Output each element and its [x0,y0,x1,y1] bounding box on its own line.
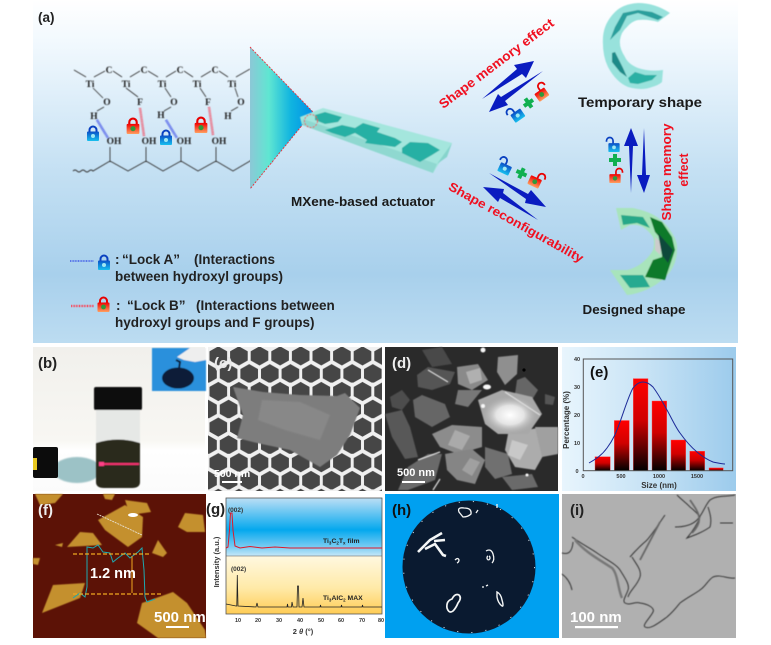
scale d: 500 nm [397,467,435,479]
icons: locks group top [505,81,551,124]
label g: (g) [206,501,225,518]
scale i: 100 nm [570,609,622,626]
molecular structure: C [212,66,219,76]
molecular structure: Ti [228,80,237,90]
label f: (f) [38,502,53,519]
tick labels: 30 [276,618,282,624]
legend: lock B [71,298,335,330]
molecular structure [73,66,272,172]
molecular structure: Ti [86,80,95,90]
axis title y: Intensity (a.u.) [212,536,221,587]
tick labels [574,357,703,480]
label d: (d) [392,355,411,372]
molecular structure: H [90,112,98,122]
panel: (g) XRD plot: AlC [331,595,343,602]
molecular structure: C [141,66,148,76]
legend: lock A: between hydroxyl groups) [115,269,283,284]
temporary shape label: Temporary shape [578,95,702,110]
arrow: from designed shape [483,187,538,220]
label c: (c) [214,355,232,372]
tick labels: 500 [616,474,626,480]
molecular structure: O [103,98,111,108]
tick labels [235,618,384,624]
panel: (g) XRD plot: T [339,538,344,545]
legend: lock A: (Interactions [194,252,275,267]
molecular structure: F [205,98,211,108]
icon: lock B [127,119,139,134]
disk edge specks [404,502,534,632]
arrow: to designed shape [489,173,546,207]
annotations: (002) [228,507,243,514]
panel: (g) XRD plot: film [346,538,360,545]
axis title y: Percentage (%) [562,391,571,449]
icon: lock A [87,126,99,141]
tick labels: 40 [574,357,580,363]
legend: lock B: “Lock B” [127,298,186,313]
panel: (a) actuator schematic [33,0,738,343]
red XRD curve [226,513,382,548]
actuator label: MXene-based actuator [291,195,435,209]
designed shape label: Designed shape [582,302,686,317]
molecular structure: O [237,98,245,108]
tick labels: 1500 [691,474,703,480]
label i: (i) [570,502,584,519]
temporary shape [603,3,670,89]
label e: (e) [590,364,608,381]
legend: lock B: hydroxyl groups and F groups) [115,315,315,330]
arrow: vertical down [637,128,650,193]
fit curve [589,382,725,464]
icons: locks group middle [495,156,546,190]
tick labels: 20 [574,413,580,419]
panel: (g) XRD plot: 2 [343,598,346,602]
label b: (b) [38,355,57,372]
tick labels: 10 [574,441,580,447]
panel: (g) XRD plot: 3 [329,598,332,602]
panel: (g) XRD plot: 2 [336,540,339,546]
arrow: from temporary shape [489,71,543,112]
label: effect vertical: effect [677,152,691,187]
panel: (g) XRD plot: Ti [323,595,329,602]
magnifying triangle [250,47,313,189]
arrow: vertical up [624,128,638,193]
legend: lock A [70,252,283,284]
panel: (g) XRD plot: MAX [346,595,363,602]
panel: (i) TEM image [562,494,736,638]
axis title x: 2 θ (°) [293,627,314,636]
bars [595,379,723,471]
molecular structure: OH [177,137,192,147]
wrinkles [562,495,735,628]
molecular structure: Ti [122,80,131,90]
icon: lock B [195,118,207,133]
height markers [73,554,163,594]
tick labels: 20 [255,618,261,624]
tick labels: 60 [338,618,344,624]
cracks [418,504,503,612]
molecular structure: C [177,66,184,76]
tick labels: 0 [575,469,579,475]
molecular structure: C [106,66,113,76]
molecular structure: Ti [193,80,202,90]
tick labels: 80 [378,618,384,624]
black XRD curve [226,575,382,607]
molecular structure: OH [142,137,157,147]
MXene-based actuator beam [300,108,452,173]
tick labels: 1000 [653,474,665,480]
molecular structure: O [170,98,178,108]
molecular structure: F [137,98,143,108]
legend: lock B: : [116,298,120,313]
panel: (g) XRD plot: x [343,540,346,546]
label: shape memory effect diagonal: Shape memory effect [436,15,557,112]
panel: (e) size distribution chart [562,347,736,491]
molecular structure: H [157,111,165,121]
tick labels: 10 [235,618,241,624]
panel: (f) AFM image [33,494,206,638]
panel: (g) XRD plot: 3 [329,540,332,546]
tick labels: 30 [574,385,580,391]
axes [583,359,733,471]
panel: (c) SEM honeycomb [208,347,382,491]
inset: pouring [152,348,206,391]
legend: lock B: (Interactions between [196,298,335,313]
icons: locks group right [606,137,622,183]
panel: (g) XRD plot: (002) [231,566,246,573]
height profile [73,545,155,602]
tick labels: 0 [581,474,585,480]
legend: lock A: : [115,252,120,267]
icon: lock A [160,130,172,145]
molecular structure: OH [107,137,122,147]
designed shape [610,208,677,295]
label: shape reconfigurability: Shape reconfigurability [446,180,586,265]
panel: (b) vial photo [33,347,206,491]
scale f: 500 nm [154,609,206,626]
tick labels: 70 [359,618,365,624]
legend: lock A: “Lock A” [122,252,180,267]
molecular structure: H [224,112,232,122]
scale c: 500 nm [214,468,250,480]
panel: (g) XRD plot [206,498,384,636]
panel: (g) XRD plot: C [331,538,336,545]
label a: (a) [38,10,54,25]
panel: (h) film disk photo [385,494,559,638]
tick labels: 50 [318,618,324,624]
molecular structure: OH [212,137,227,147]
panel: (d) STEM flakes [385,347,558,491]
axis title x: Size (nm) [641,481,677,490]
molecular structure: Ti [158,80,167,90]
panel: (g) XRD plot: Ti [323,538,329,545]
height label: 1.2 nm [90,566,136,582]
tick labels: 40 [297,618,303,624]
label h: (h) [392,502,411,519]
arrow: to temporary shape [482,61,534,99]
label: shape memory effect vertical: Shape memory [660,123,674,220]
